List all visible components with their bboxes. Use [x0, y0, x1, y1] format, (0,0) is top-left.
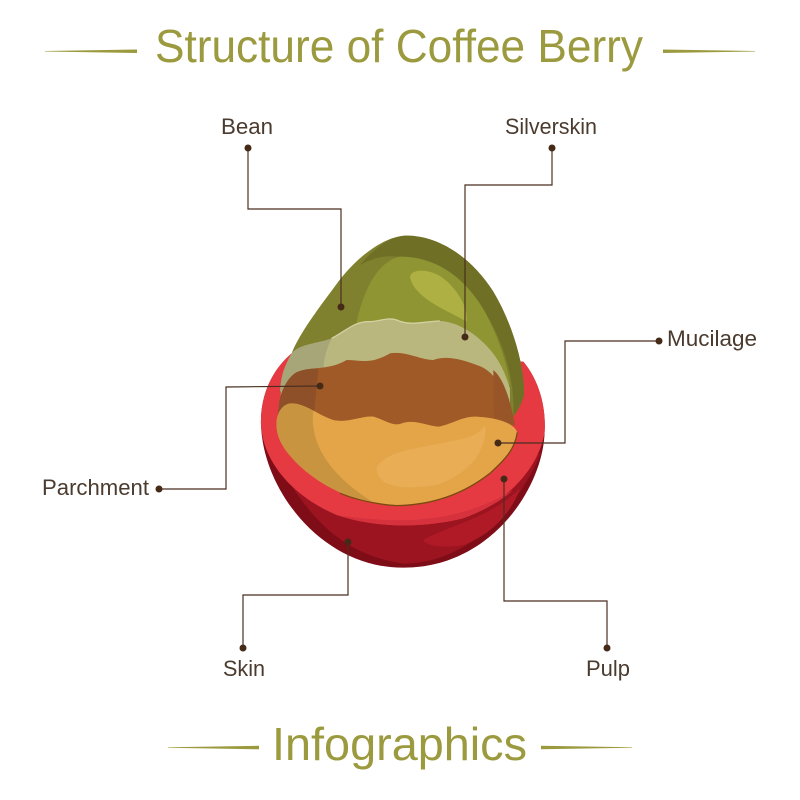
leader: Bean [244, 144, 344, 310]
leader: Mucilage [494, 338, 662, 446]
label: Silverskin: Silverskin [505, 114, 597, 139]
bean: olive shell [292, 236, 524, 417]
label: Pulp: Pulp [586, 656, 630, 681]
leader: Silverskin [462, 144, 556, 340]
leader: Parchment [156, 382, 324, 492]
pulp: bright red rim [261, 353, 545, 525]
coffee berry illustration [261, 236, 545, 568]
footer heading [168, 718, 632, 770]
label: Mucilage: Mucilage [667, 326, 757, 351]
mucilage: orange layer [277, 403, 517, 506]
leader: Skin [240, 538, 352, 652]
label: Skin: Skin [223, 656, 265, 681]
skin: red outer bowl [261, 353, 545, 568]
silverskin layer [280, 319, 510, 412]
label: Bean: Bean [221, 114, 273, 139]
parchment: brown layer [277, 353, 515, 445]
label: Parchment: Parchment [42, 475, 149, 500]
footer heading: Infographics [272, 718, 527, 770]
title: Structure of Coffee Berry [155, 20, 643, 72]
leader: Pulp [500, 476, 610, 652]
